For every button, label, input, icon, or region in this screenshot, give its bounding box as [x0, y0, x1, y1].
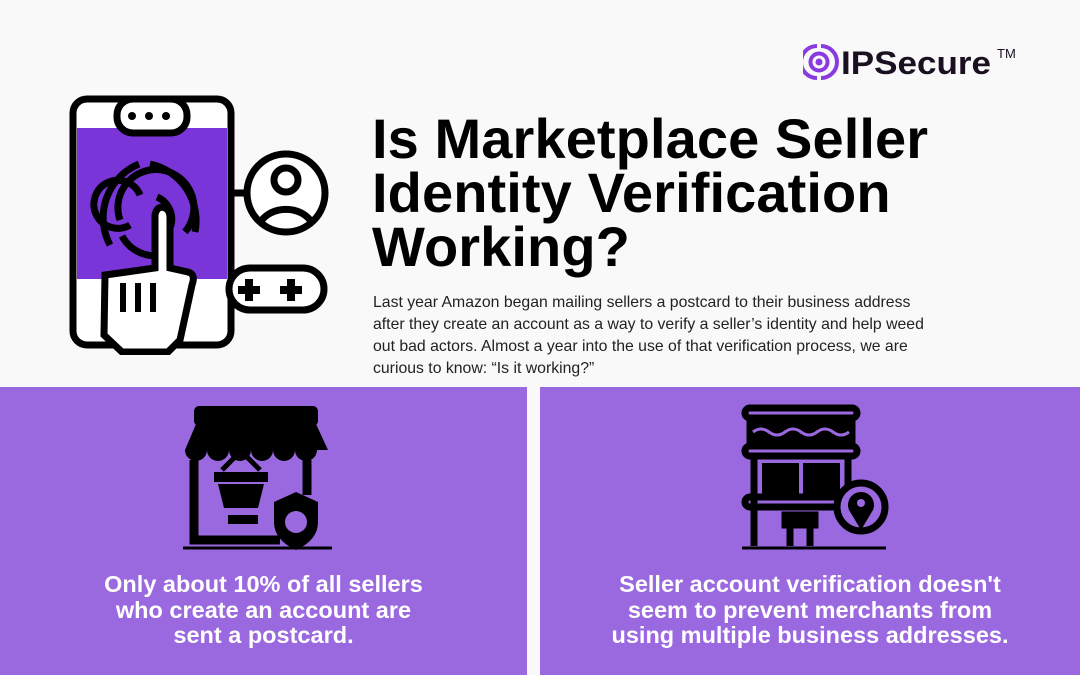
logo: TM [997, 46, 1016, 61]
title [372, 107, 928, 278]
logo: IPSecure [841, 45, 991, 81]
icon: logo rings [801, 46, 837, 78]
hero icon: phone fingerprint [70, 96, 328, 355]
icon: mobile shop [183, 406, 332, 550]
panel text: Seller account verification doesn't [619, 571, 1001, 597]
panel text: sent a postcard. [173, 622, 354, 648]
panel: postcard stat [0, 387, 527, 675]
title: Identity Verification [372, 161, 891, 224]
logo [803, 44, 1016, 81]
panel text: who create an account are [116, 596, 411, 622]
intro text: Last year Amazon began mailing sellers a postcard to their business address after they create an account as a way to verify a seller’s identity and help weed out bad actors. Almost a year into the use of that verification process, we are curious to know: “Is it working?” [373, 294, 924, 377]
panel text: Only about 10% of all sellers [104, 571, 423, 597]
title: Working? [372, 215, 630, 278]
title: Is Marketplace Seller [372, 107, 928, 170]
icon: storefront with pin [742, 404, 888, 550]
panel text [104, 571, 423, 648]
panel text: seem to prevent merchants from [628, 596, 992, 622]
panel: multiple addresses [540, 387, 1080, 675]
panel text: using multiple business addresses. [611, 622, 1008, 648]
panel text [611, 571, 1008, 648]
